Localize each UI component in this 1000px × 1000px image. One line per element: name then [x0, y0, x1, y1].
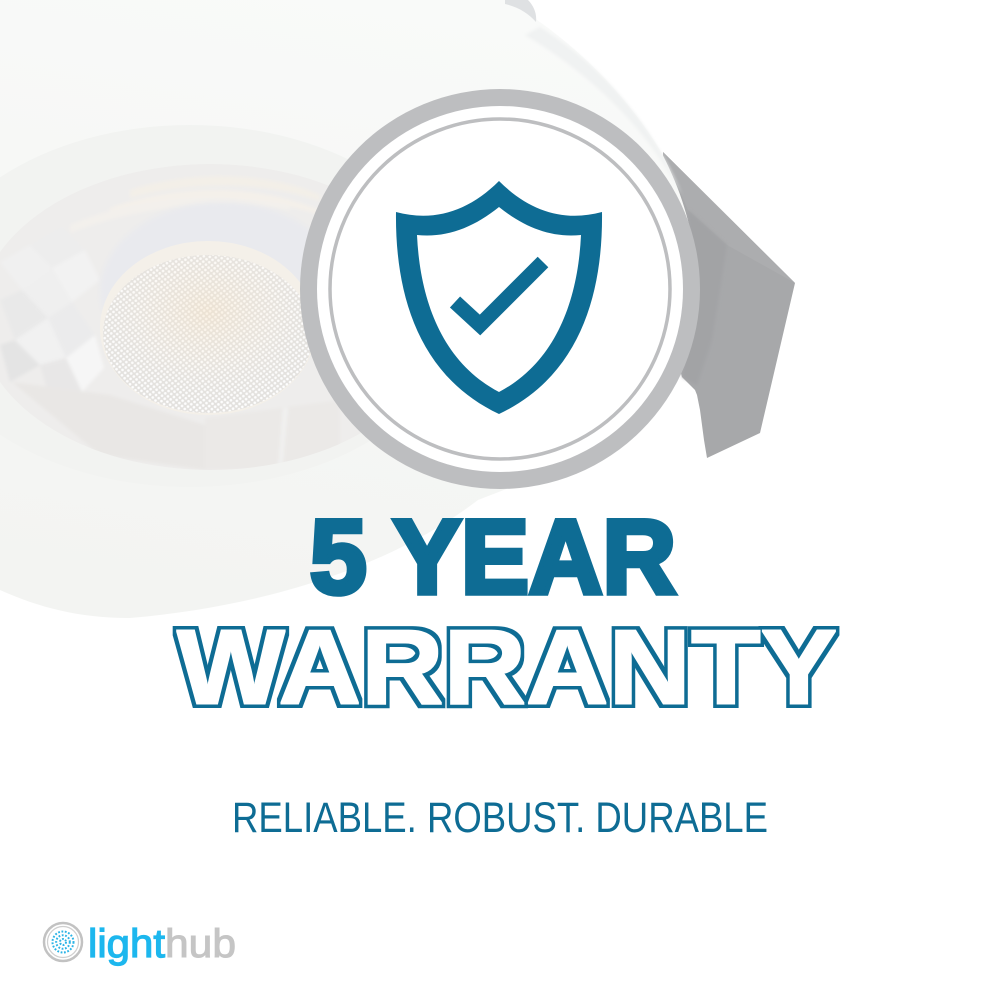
- logo word: light: light: [88, 922, 165, 966]
- logo icon: [44, 923, 82, 961]
- heading: 5 year: 5 YEAR: [310, 499, 676, 616]
- logo: lighthub: [44, 922, 236, 966]
- reflector facets: [2, 339, 102, 388]
- badge outer ring: [300, 89, 700, 489]
- warranty badge: [300, 89, 700, 489]
- top screw: [505, 0, 536, 22]
- fitting body: [0, 0, 697, 618]
- logo word: hub: hub: [165, 922, 236, 966]
- fitting bracket: [660, 152, 795, 458]
- badge inner ring: [330, 119, 670, 459]
- lens collar: [100, 202, 344, 382]
- fitting rim highlight: [525, 27, 682, 195]
- lens: [100, 241, 316, 415]
- heading: warranty outline: WARRANTY: [177, 608, 837, 726]
- tagline: RELIABLE. ROBUST. DURABLE: [232, 794, 768, 842]
- outer bezel ring: [0, 125, 460, 487]
- icon: shield with check: [396, 181, 602, 414]
- reflector opening: [0, 178, 340, 470]
- light fitting photo: [0, 0, 795, 618]
- badge white disc: [317, 106, 683, 472]
